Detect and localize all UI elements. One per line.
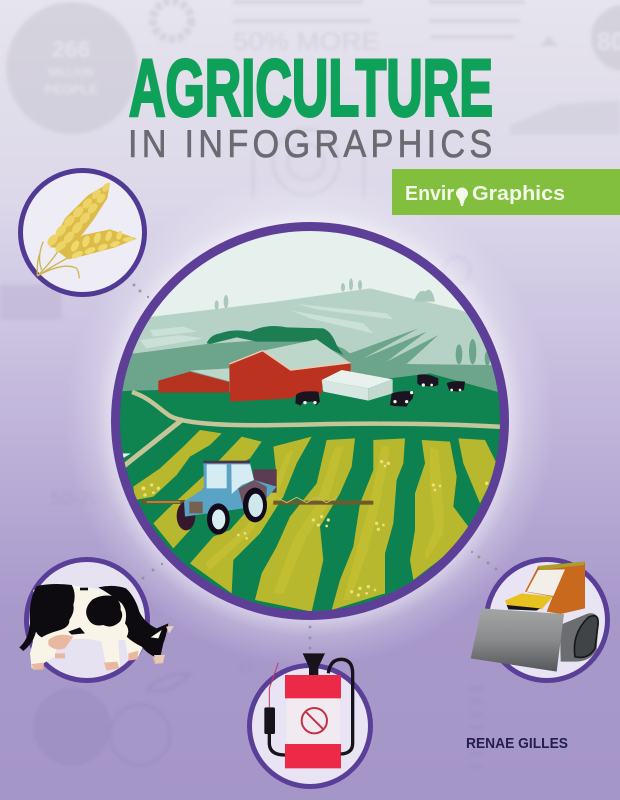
ghost globe: 266 million people [6,2,138,134]
ghost table [0,285,62,320]
wheat icon circle [20,170,144,294]
funnel [303,653,325,675]
road [124,392,505,466]
hoses [328,659,353,754]
red bands [285,675,341,698]
series banner: EnviroGraphics: Graphics [472,183,565,205]
ghost globe: 266 million people: 266 [52,36,90,62]
lower ear [58,229,137,259]
orange cab [525,562,585,614]
blade [471,608,564,672]
mid green field [110,328,510,453]
ghost globe: 266 million people: MILLION [48,67,94,79]
distant trees [215,278,435,310]
light furrows on hill [140,304,393,348]
ghost text: 50-70: 50-70 [50,488,101,510]
ghost gear [153,1,191,39]
author name: RENAE GILLES [466,735,568,752]
tractor [177,461,277,535]
foreground pasture [110,373,510,453]
ghost lines [233,0,525,39]
main red barn [229,339,351,402]
lighter stripes in rows [205,447,443,600]
white shed [322,370,393,401]
stalks and awns [37,237,79,278]
crop speckles [141,460,488,597]
udder and hooves [32,635,164,671]
upper half of scene [110,278,510,453]
tank body [287,697,340,745]
ghost text: 50% more: 50% MORE [233,28,380,56]
distant hill [132,288,492,366]
cow icon circle [19,560,174,680]
crop rows [133,430,497,612]
cow body [30,583,157,670]
subtitle: In Infographics: IN INFOGRAPHICS [128,122,492,165]
prohibition sign [302,708,327,733]
connector dots [132,284,498,650]
cows [295,374,465,407]
ghost plate [253,129,364,198]
dark tree line [207,326,343,355]
track [560,613,598,662]
spray boom [142,497,373,505]
ghost house shape [510,100,620,135]
ghost triangle icon [540,36,558,46]
ghost drop: 80 [591,5,620,71]
ghost number: 12 [238,659,254,675]
black patches [19,584,168,658]
upper ear [50,183,110,248]
small red barn [158,368,229,393]
face marks [151,630,162,638]
cab window [527,569,565,596]
ghost globe: 266 million people: PEOPLE [45,82,98,97]
series banner: EnviroGraphics [392,169,620,215]
series banner: EnviroGraphics: Envir [405,183,454,205]
bulldozer icon circle [471,560,608,680]
main illustration: farm scene [110,226,510,620]
main circle ring [116,226,504,616]
crop field [124,430,498,611]
ghost bar chart [470,687,483,768]
yellow hood [505,593,553,609]
glow around main illustration [65,176,555,666]
icon: light bulb [456,188,468,206]
ghost gear right [444,257,470,283]
ghost apples [35,674,190,765]
sprayer icon circle [250,653,370,786]
poplar trees [456,339,490,366]
spray wand [269,663,278,707]
